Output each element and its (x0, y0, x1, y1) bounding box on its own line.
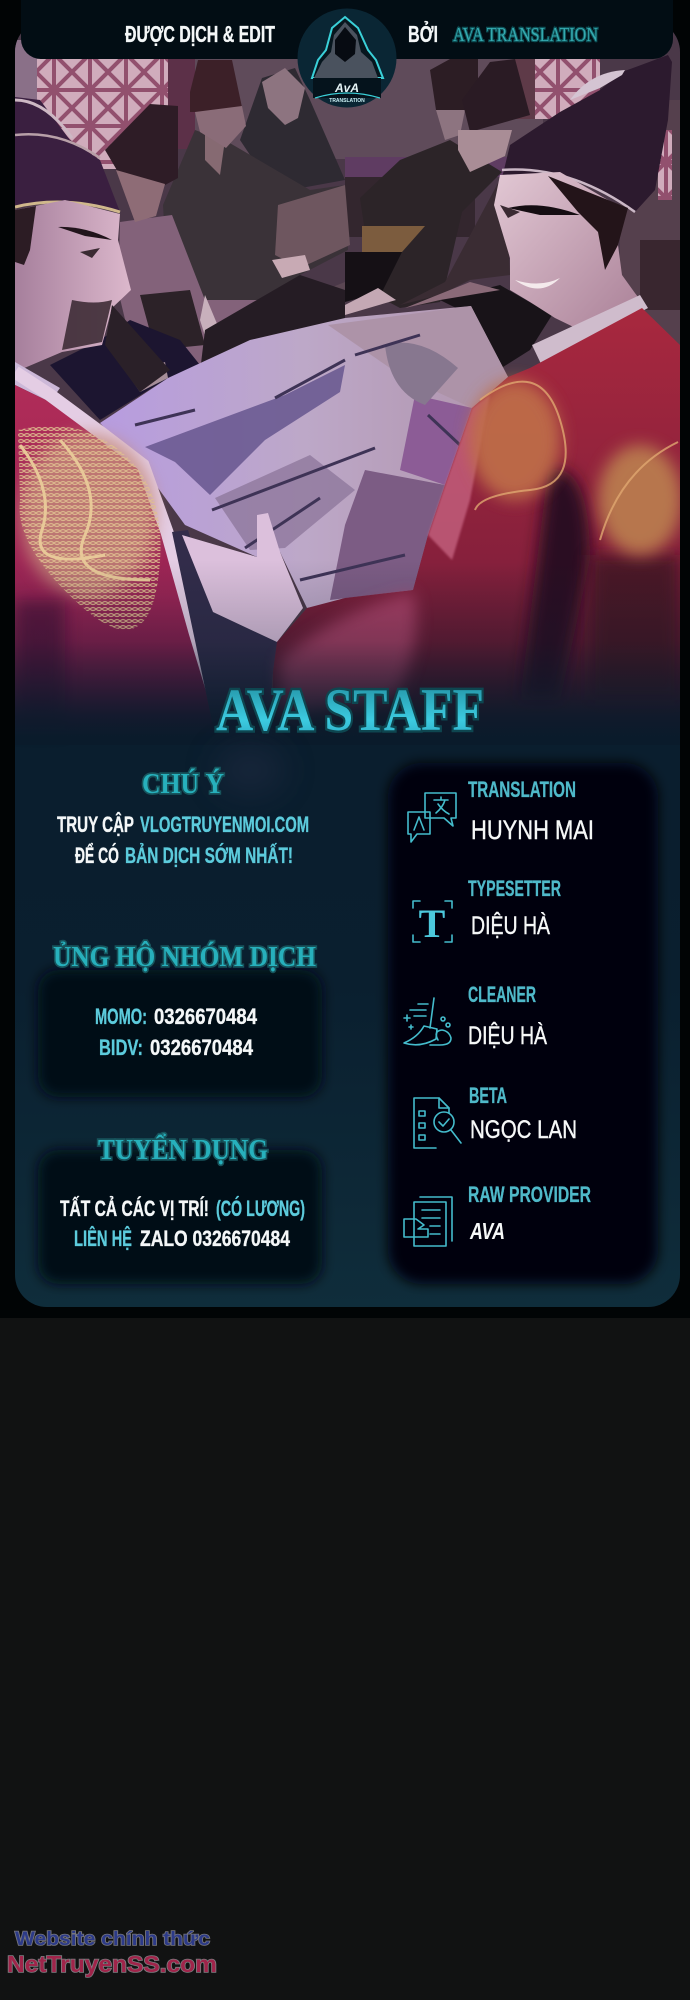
notice line 1: TRUY CẬP (57, 812, 134, 837)
label: typesetter: TYPESETTER (468, 876, 561, 901)
left official (15, 97, 216, 735)
recruitment line 2: ZALO 0326670484 (140, 1226, 291, 1251)
panel: main card (15, 20, 682, 1307)
header text: group name: AVA TRANSLATION (453, 24, 598, 46)
bidv number: 0326670484 (150, 1035, 254, 1060)
recruitment line 2 (74, 1226, 291, 1251)
label: beta: BETA (469, 1083, 507, 1108)
notice line 2: BẢN DỊCH SỚM NHẤT! (125, 843, 293, 868)
notice line 2: ĐỂ CÓ (75, 843, 119, 868)
panel: recruitment box (38, 1134, 322, 1284)
recruitment line 1: TẤT CẢ CÁC VỊ TRÍ! (60, 1196, 209, 1221)
heading: recruitment: TUYỂN DỤNG (98, 1134, 268, 1166)
panel: staff roles (388, 763, 658, 1284)
header bar (21, 0, 673, 59)
blueprint sheet (100, 306, 508, 608)
icon: document inspection (414, 1098, 461, 1148)
role: raw provider (404, 1182, 591, 1246)
logo: hooded figure (298, 8, 396, 108)
momo number (95, 1004, 258, 1029)
outer dark frame (0, 0, 690, 1318)
notice line 1: VLOGTRUYENMOI.COM (140, 812, 309, 837)
name: Ngoc Lan: NGỌC LAN (470, 1116, 577, 1144)
role: beta (414, 1083, 577, 1148)
name: Dieu Ha: DIỆU HÀ (468, 1021, 547, 1050)
bidv number: BIDV: (99, 1035, 143, 1060)
icon: letter T (413, 901, 452, 946)
header text: translated by: ĐƯỢC DỊCH & EDIT (125, 21, 275, 47)
role: typesetter (413, 876, 561, 946)
title: AVA STAFF: AVA STAFF (216, 677, 484, 743)
watermark line 1: Website chính thức (15, 1929, 210, 1950)
gap between robe and sleeve (172, 530, 277, 704)
momo number: MOMO: (95, 1004, 147, 1029)
name: AVA: AVA (469, 1218, 505, 1244)
right official (272, 55, 682, 735)
logo: hooded figure: AvA (334, 81, 359, 95)
recruitment line 2: LIÊN HỆ (74, 1226, 132, 1251)
panel: support box (38, 942, 322, 1097)
icon: document stack (404, 1197, 452, 1246)
notice line 2 (75, 843, 293, 868)
label: raw provider: RAW PROVIDER (468, 1182, 591, 1207)
lower smudge (232, 756, 268, 784)
icon: translate bubbles (408, 793, 456, 842)
bidv number (99, 1035, 254, 1060)
footer watermark (7, 1929, 217, 1977)
fade to dark lower area (15, 574, 680, 740)
icon: letter T: T (419, 901, 446, 946)
background officials (50, 59, 552, 420)
momo number: 0326670484 (154, 1004, 258, 1029)
illustration: officials studying blueprint (15, 20, 682, 740)
role: translation (408, 777, 594, 845)
watermark line 2: NetTruyenSS.com (7, 1951, 217, 1977)
name: Huynh Mai: HUYNH MAI (471, 815, 594, 845)
logo: hooded figure: TRANSLATION (329, 98, 365, 104)
lower card background (15, 20, 680, 1307)
name: Dieu Ha: DIỆU HÀ (471, 911, 550, 940)
lattice windows (37, 59, 672, 200)
heading: support: ỦNG HỘ NHÓM DỊCH (53, 942, 316, 973)
notice line 1 (57, 812, 309, 837)
hand holding sheet (182, 513, 303, 642)
heading: notice: CHÚ Ý (142, 769, 224, 800)
label: cleaner: CLEANER (468, 982, 536, 1007)
icon: broom (404, 998, 451, 1045)
recruitment line 1: (CÓ LƯƠNG) (216, 1196, 305, 1221)
panel: notice box (57, 769, 309, 868)
role: cleaner (404, 982, 547, 1050)
label: translation: TRANSLATION (468, 777, 576, 802)
header text: by: BỞI (408, 19, 438, 47)
